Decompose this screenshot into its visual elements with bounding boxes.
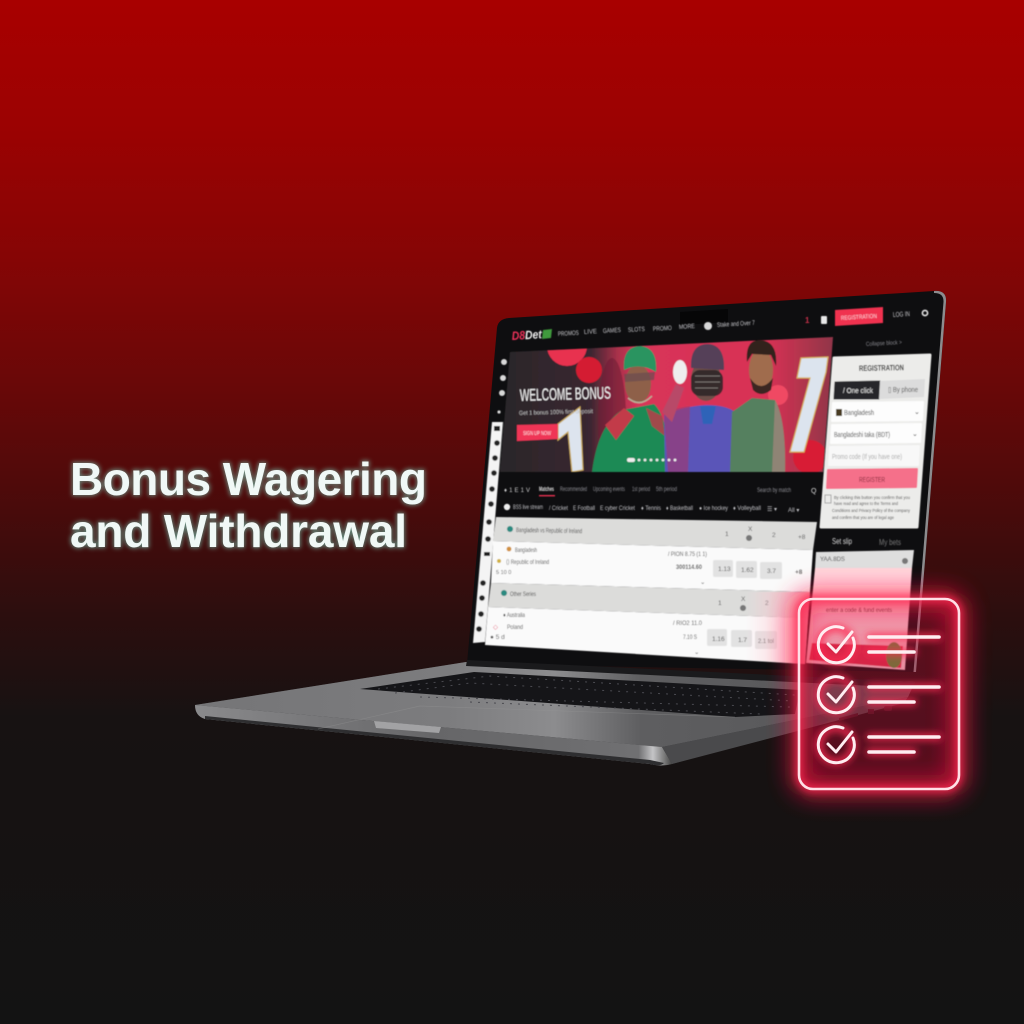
navigation bar: GAMES (603, 327, 622, 335)
registration card: and confirm that you are of legal age (832, 515, 894, 520)
table text: ⌄ (694, 649, 699, 656)
matches toolbar: 5th period (656, 487, 677, 493)
table text: ● 5 d (490, 634, 505, 641)
check item 3 (818, 727, 939, 763)
table text: ⟨⟩ Republic of Ireland (506, 558, 549, 566)
screen content (473, 307, 930, 670)
table text: ⌄ (700, 579, 705, 586)
right column (806, 340, 930, 670)
table text: 1.16 (712, 636, 725, 643)
table text: 3.7 (767, 568, 776, 575)
matches toolbar: 1st period (632, 487, 650, 493)
table text: Poland (507, 624, 523, 631)
matches toolbar: All ▾ (788, 508, 799, 514)
matches toolbar: Q (811, 488, 817, 495)
table text: Other Series (510, 591, 537, 598)
check item 1 (818, 627, 939, 663)
navigation bar: Stake and Over 7 (717, 320, 755, 329)
right column: My bets (879, 538, 901, 547)
navigation bar: REGISTRATION (841, 314, 877, 322)
laptop (195, 291, 946, 766)
table text: 7.10 S (683, 634, 697, 641)
navigation bar: MORE (679, 323, 696, 331)
matches toolbar: BSS live stream (513, 505, 543, 511)
matches toolbar: Upcoming events (593, 487, 625, 493)
registration card: Bangladesh (844, 408, 874, 417)
betslip card: enter a code & fund events (826, 607, 893, 614)
heading: Bonus Wagering (70, 453, 427, 505)
matches toolbar: ♦ Tennis (641, 506, 661, 512)
screen frame top notch (680, 309, 728, 325)
registration card (821, 355, 930, 527)
hero banner: SIGN UP NOW (523, 431, 552, 437)
registration card: Conditions and Privacy Policy of the company (832, 508, 911, 513)
navigation bar: LIVE (584, 328, 598, 336)
matches toolbar (504, 487, 817, 514)
matches toolbar: ♦ Volleyball (733, 506, 761, 512)
table text: 2 (772, 532, 776, 539)
tabs: Set slip (832, 537, 852, 546)
register button (835, 307, 883, 326)
registration card: REGISTRATION (859, 363, 904, 373)
navigation bar (511, 307, 928, 343)
right column: Collapse block > (866, 340, 902, 348)
hero banner: Get 1 bonus 100% first deposit (519, 409, 593, 417)
table text: / PION 8.75 (1 1) (668, 551, 707, 558)
table text: 1 (718, 600, 722, 607)
table text: X (741, 596, 746, 603)
table text: 1 (725, 531, 729, 538)
row header 2 (488, 583, 810, 618)
table text: 300114.60 (676, 564, 702, 571)
heading: and Withdrawal (70, 505, 407, 557)
panel outline (799, 599, 959, 789)
matches toolbar: ♦ Basketball (666, 506, 693, 512)
row header 1 (493, 517, 817, 550)
registration card: / One click (843, 388, 873, 395)
registration card: ⌄ (914, 409, 920, 416)
player 3 (730, 340, 785, 472)
heading (70, 453, 427, 557)
panel glow (799, 599, 959, 789)
registration card: have read and agree to the Terms and (834, 501, 898, 506)
registration card: ▯ By phone (888, 385, 918, 394)
navigation bar: SLOTS (628, 326, 646, 334)
registration card: By clicking this button you confirm that you (834, 495, 910, 500)
table text (490, 526, 806, 656)
table text: +8 (798, 534, 806, 541)
matches toolbar: ● Ice hockey (699, 506, 728, 512)
matches toolbar: Search by match (757, 488, 791, 494)
table text: 1.7 (738, 637, 747, 644)
table text: Bangladesh (515, 547, 537, 554)
side ports (839, 706, 892, 721)
registration card: ⌄ (912, 431, 918, 438)
table text: 2.1 tol (758, 638, 774, 645)
trackpad (318, 706, 735, 729)
matches toolbar: Matches (539, 487, 554, 493)
register action button (827, 469, 917, 488)
welcome bonus text: WELCOME BONUS (520, 383, 611, 405)
sign up button (517, 424, 558, 441)
heading: Bonus Wagering (70, 453, 427, 505)
thumb notch (374, 721, 441, 733)
matches toolbar: E cyber Cricket (600, 506, 635, 512)
table text: X (748, 526, 753, 533)
table text: 1.62 (741, 567, 754, 574)
registration card: Promo code (If you have one) (832, 454, 902, 461)
check item 2 (818, 677, 939, 713)
pagination dots (627, 458, 676, 462)
matches toolbar: E Football (573, 506, 595, 512)
navigation bar: 1 (805, 316, 810, 325)
registration card: REGISTER (859, 477, 885, 484)
table text: / RIO2 11.0 (673, 620, 702, 627)
table text: +8 (795, 569, 803, 576)
navigation bar: PROMO (653, 325, 672, 333)
keyboard (360, 672, 800, 717)
table text: 5 10 0 (496, 570, 511, 576)
numeral 1 graphic (558, 407, 583, 472)
table text: ● Australia (503, 612, 525, 619)
player 2 (662, 344, 734, 473)
table text: 1.13 (718, 566, 731, 573)
matches toolbar: ☰ ▾ (767, 506, 777, 513)
row match 2 (485, 607, 808, 664)
matches toolbar: ♦ 1 E 1 V (504, 488, 530, 494)
registration card: Bangladeshi taka (BDT) (834, 430, 890, 439)
checklist icon (799, 599, 959, 789)
numeral 7 graphic (790, 357, 828, 452)
left sidebar (473, 359, 507, 643)
table text: Bangladesh vs Republic of Ireland (516, 527, 582, 535)
match table (485, 517, 817, 664)
table text: ◇ (493, 624, 499, 631)
row match 1 (491, 541, 813, 592)
betslip card: YAA.8DS (820, 557, 845, 563)
navigation bar: PROMOS (558, 330, 580, 338)
table text: 2 (765, 600, 769, 607)
navigation bar: LOG IN (893, 311, 910, 319)
matches toolbar: / Cricket (549, 506, 568, 512)
infographic canvas (0, 0, 1024, 817)
player 1 (592, 346, 670, 472)
matches toolbar: Recommended (560, 487, 587, 493)
laptop base (195, 662, 915, 766)
hero banner (500, 336, 834, 473)
heading: and Withdrawal (70, 505, 407, 557)
right fade (745, 592, 810, 664)
betslip card (806, 550, 914, 670)
laptop lid (467, 291, 946, 672)
navigation bar: D8Det (511, 327, 543, 343)
